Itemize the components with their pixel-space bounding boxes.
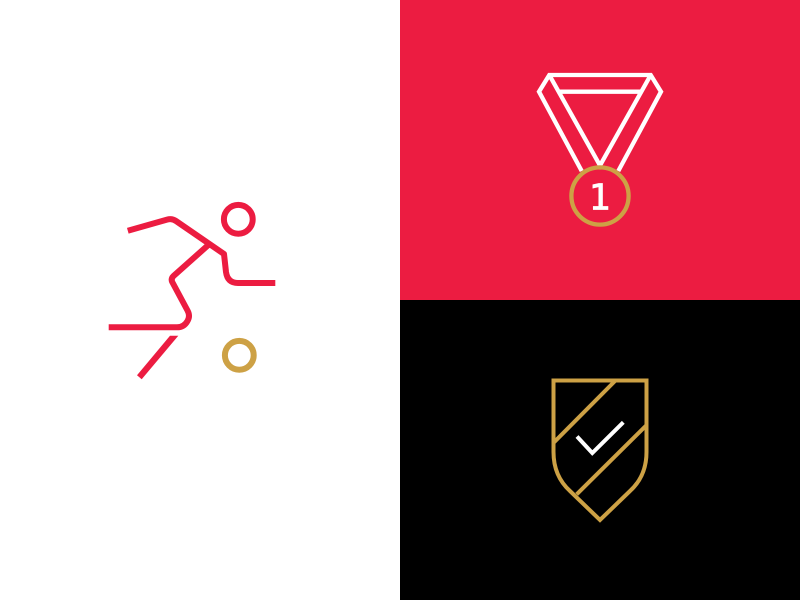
runner torso and rear leg — [109, 244, 210, 327]
icon: shield with check — [554, 380, 646, 520]
icon: running athlete — [109, 205, 275, 379]
medal ribbon — [539, 75, 661, 171]
panel: white runner background — [0, 0, 400, 600]
shield upper stripe — [554, 381, 615, 442]
panel: red medal background — [400, 0, 800, 300]
ball — [225, 341, 254, 370]
shield outline — [554, 380, 646, 520]
check mark — [577, 422, 623, 453]
icon: medal — [539, 75, 661, 225]
runner lower leg — [137, 336, 178, 379]
panel: black shield background — [400, 300, 800, 600]
shield lower stripe — [577, 426, 646, 494]
medal number: 1 — [589, 178, 610, 218]
runner arm and back — [128, 219, 275, 283]
medal disc — [571, 167, 629, 225]
runner head — [224, 205, 253, 234]
